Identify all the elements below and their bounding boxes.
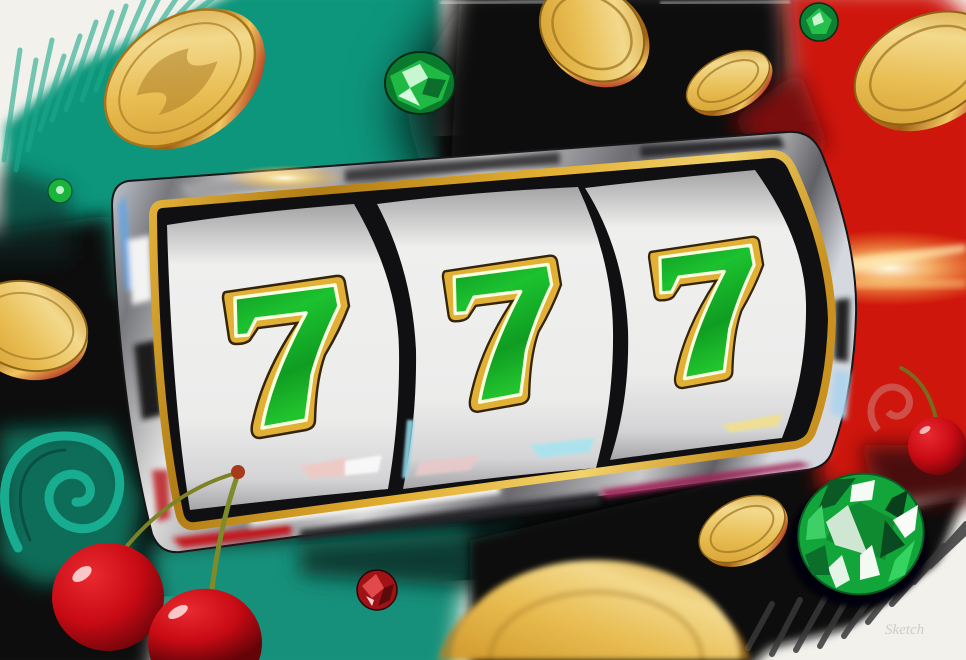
emerald: top right small (800, 3, 838, 41)
emerald facets (805, 478, 918, 588)
right cherry (148, 589, 262, 660)
coin: large blurred at bottom (438, 560, 750, 660)
grey pencil hatching, lower right (748, 524, 966, 654)
teal pencil hatching, upper left (4, 0, 216, 170)
cherry stems (122, 465, 245, 606)
cherry highlights (70, 563, 190, 622)
light flare to the right of the frame (770, 230, 966, 306)
chrome sparkle (225, 165, 345, 191)
coin: top left (79, 0, 292, 182)
seven on reel one (223, 276, 349, 438)
emerald: large lower right (781, 456, 941, 612)
seven on reel two (443, 256, 561, 412)
cherry: right edge (901, 368, 966, 475)
emerald: left tiny (48, 179, 72, 203)
coin: small upper right (677, 37, 783, 129)
coin: small lower right (688, 481, 800, 581)
artist signature: Sketch (885, 622, 924, 638)
reel two (377, 187, 613, 489)
emerald: top centre (385, 52, 455, 114)
cherries: lower left (52, 465, 262, 660)
slot machine frame (112, 132, 856, 552)
ruby: bottom centre (357, 570, 397, 610)
reel three (585, 170, 806, 460)
coin: left edge (0, 269, 99, 392)
left cherry (52, 543, 164, 651)
coin: top right (835, 0, 966, 155)
paper hatching along the top edge (440, 1, 790, 3)
teal swirl at lower left (5, 436, 120, 548)
paper corner, lower right (810, 545, 966, 660)
faint swirl left of right cherry (871, 387, 910, 430)
reel reflections (300, 414, 782, 478)
seven on reel three (649, 237, 763, 388)
coin: top centre (518, 0, 670, 109)
chrome outer frame (112, 132, 856, 552)
reel one (167, 204, 399, 510)
chrome reflections (119, 136, 850, 548)
gold inner frame and dark reel window (153, 154, 832, 526)
